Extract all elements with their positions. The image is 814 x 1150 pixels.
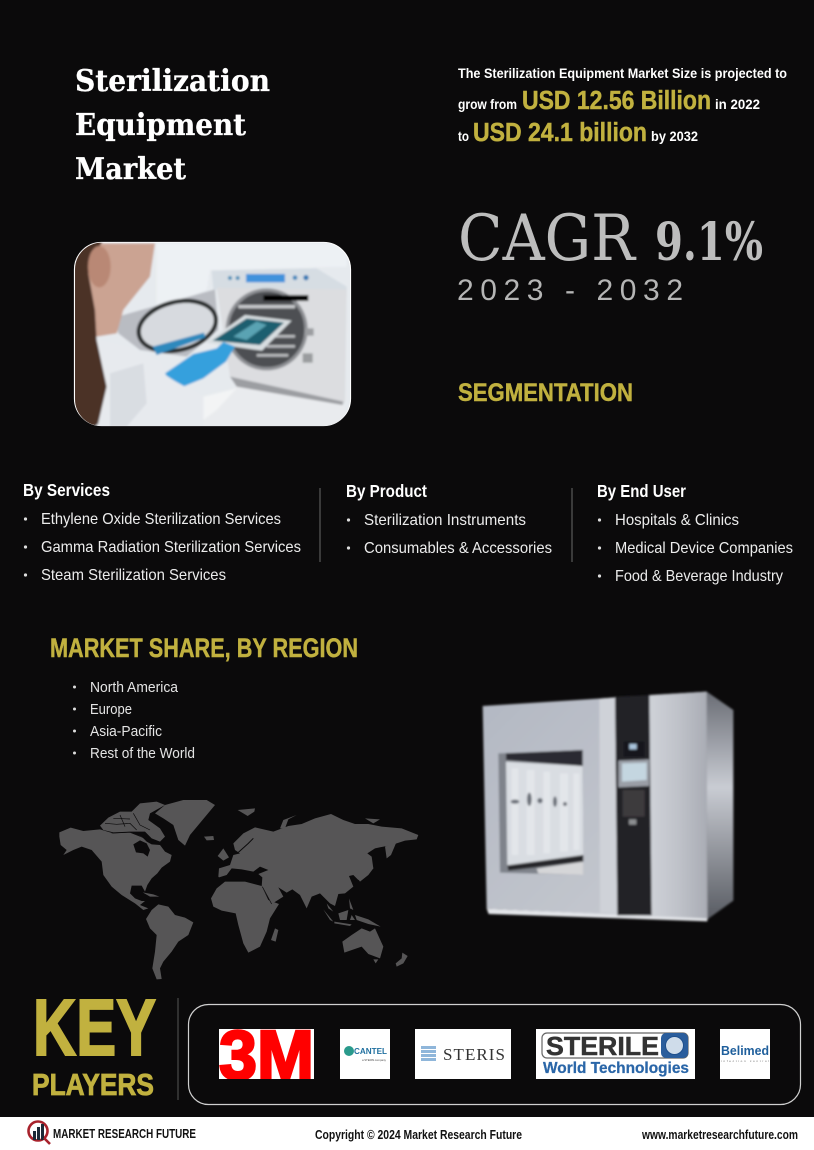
key players heading bbox=[32, 983, 156, 1102]
footer logo icon bbox=[28, 1122, 50, 1144]
logo: Belimed: infection control bbox=[721, 1059, 769, 1063]
divider bbox=[572, 488, 573, 562]
heading: segmentation: SEGMENTATION bbox=[458, 379, 633, 407]
segment column: by product bbox=[346, 481, 552, 557]
logo: Cantel: a STERIS company bbox=[362, 1058, 386, 1062]
logo: Sterile World Technologies: World Technologies bbox=[543, 1060, 689, 1077]
market size statement: USD 12.56 Billion bbox=[522, 87, 711, 115]
segment column: by end user: By End User bbox=[597, 481, 686, 501]
region list bbox=[73, 680, 195, 762]
segment column: by services: Ethylene Oxide Sterilization Services bbox=[41, 511, 281, 528]
logo: Sterile World Technologies bbox=[536, 1029, 695, 1079]
americas and greenland bbox=[59, 800, 215, 979]
segment column: by product: By Product bbox=[346, 481, 427, 501]
region list: Europe bbox=[90, 702, 132, 718]
region list: North America bbox=[90, 680, 179, 696]
segment column: by product: Consumables & Accessories bbox=[364, 540, 552, 557]
segment column: by end user: Hospitals & Clinics bbox=[615, 512, 739, 529]
market size statement: in 2022 bbox=[715, 96, 760, 112]
photo: large sterilizer cabinet bbox=[483, 692, 733, 921]
CAGR figure: CAGR bbox=[458, 202, 637, 276]
divider bbox=[320, 488, 321, 562]
market size statement: to bbox=[458, 128, 469, 144]
CAGR figure: 2023 - 2032 bbox=[457, 274, 683, 307]
logo: Cantel bbox=[340, 1029, 390, 1079]
footer bar bbox=[0, 1117, 814, 1150]
region list: Rest of the World bbox=[90, 746, 195, 762]
key players heading: KEY bbox=[33, 983, 156, 1072]
title: Equipment bbox=[75, 107, 246, 142]
title bbox=[75, 63, 270, 186]
segment column: by services: Steam Sterilization Services bbox=[41, 567, 226, 584]
eurasia africa australia bbox=[211, 808, 418, 967]
market size statement: by 2032 bbox=[651, 128, 698, 144]
market size statement: The Sterilization Equipment Market Size is projected to bbox=[458, 65, 787, 81]
segment column: by end user: Medical Device Companies bbox=[615, 540, 793, 557]
segment column: by services bbox=[23, 480, 301, 584]
key players heading: PLAYERS bbox=[32, 1067, 154, 1102]
logo: Cantel: CANTEL bbox=[354, 1046, 387, 1056]
CAGR figure bbox=[457, 202, 763, 307]
title: Sterilization bbox=[75, 63, 270, 98]
logo: Steris: STERIS bbox=[443, 1045, 505, 1064]
segment column: by services: Gamma Radiation Sterilization Services bbox=[41, 539, 301, 556]
logo: Sterile World Technologies: STERILE bbox=[546, 1031, 659, 1061]
market size statement bbox=[458, 65, 787, 147]
photo: technician loading sterilizer bbox=[73, 240, 353, 430]
logo: 3M: 3M bbox=[219, 1016, 314, 1094]
segment column: by services: By Services bbox=[23, 480, 110, 500]
title: Market bbox=[75, 151, 186, 186]
logo: Steris bbox=[415, 1029, 511, 1079]
logo: 3M bbox=[219, 1029, 314, 1079]
logo: Belimed: Belimed bbox=[721, 1044, 769, 1058]
heading: market share by region: MARKET SHARE, BY REGION bbox=[50, 633, 358, 663]
market size statement: USD 24.1 billion bbox=[473, 119, 647, 147]
key players panel bbox=[188, 1004, 800, 1104]
region list: Asia-Pacific bbox=[90, 724, 162, 740]
segment column: by end user: Food & Beverage Industry bbox=[615, 568, 783, 585]
CAGR figure: 9.1% bbox=[655, 212, 763, 273]
footer brand: MARKET RESEARCH FUTURE bbox=[53, 1127, 196, 1141]
market size statement: grow from bbox=[458, 96, 517, 112]
segment column: by product: Sterilization Instruments bbox=[364, 512, 526, 529]
footer copyright: Copyright © 2024 Market Research Future bbox=[315, 1128, 522, 1142]
world map bbox=[59, 800, 418, 979]
divider bbox=[178, 998, 179, 1100]
segment column: by end user bbox=[597, 481, 793, 585]
logo: Belimed bbox=[720, 1029, 770, 1079]
